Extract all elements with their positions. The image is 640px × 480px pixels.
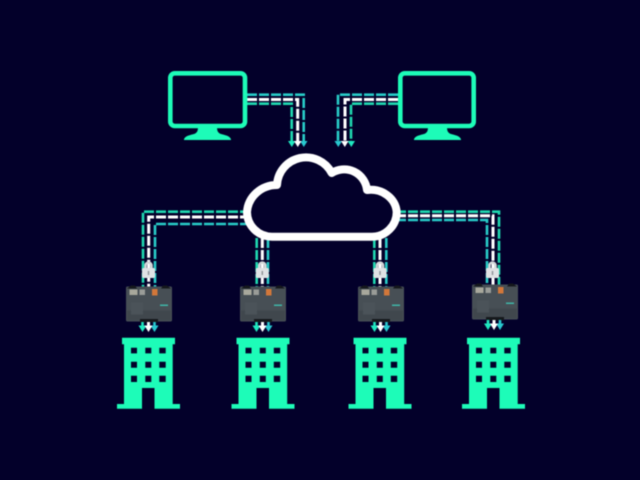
device 3 bbox=[358, 286, 404, 322]
connector: cloud to device 1 bbox=[143, 212, 250, 287]
icon: right monitor bbox=[400, 73, 474, 140]
arrows: device 1 to building 1 bbox=[138, 322, 158, 332]
icon: building 4 bbox=[462, 338, 525, 409]
connector: right monitor to cloud bbox=[338, 95, 398, 143]
device 4 bbox=[472, 284, 518, 320]
connector: cloud to device 4 bbox=[396, 212, 499, 286]
icon: lock 4 bbox=[486, 262, 499, 278]
connector: cloud to device 3 bbox=[374, 238, 386, 287]
arrowheads: right monitor bbox=[334, 141, 355, 147]
icon: lock 2 bbox=[256, 262, 269, 278]
arrows: device 3 to building 3 bbox=[370, 322, 390, 332]
arrowheads: left monitor bbox=[288, 141, 308, 147]
icon: cloud bbox=[247, 157, 397, 237]
connector: left monitor to cloud bbox=[247, 95, 304, 143]
device 1 bbox=[126, 286, 172, 322]
icon: building 2 bbox=[232, 338, 294, 409]
icon: lock 3 bbox=[374, 262, 386, 278]
icon: building 1 bbox=[117, 338, 180, 409]
icon: left monitor bbox=[170, 73, 245, 140]
arrows: device 4 to building 4 bbox=[484, 320, 504, 330]
icon: lock 1 bbox=[142, 262, 155, 278]
arrows: device 2 to building 2 bbox=[252, 322, 272, 332]
device 2 bbox=[240, 286, 286, 322]
icon: building 3 bbox=[348, 338, 412, 409]
connector: cloud to device 2 bbox=[257, 238, 268, 287]
